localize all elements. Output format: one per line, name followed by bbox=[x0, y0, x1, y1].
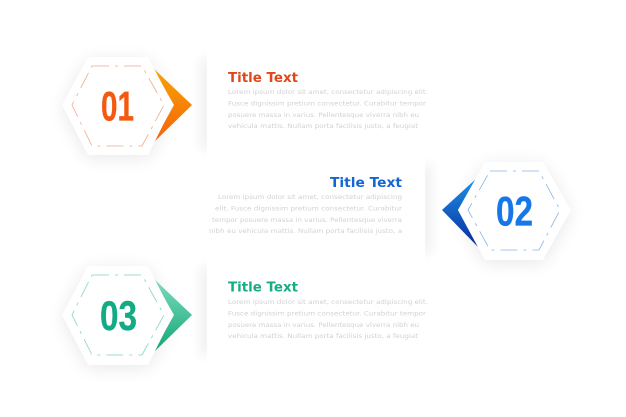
icon: blue arrow bbox=[442, 177, 478, 247]
dashed hexagon 01 bbox=[72, 66, 164, 146]
body text 02: Lorem ipsum dolor sit amet, consectetur adipiscing bbox=[218, 194, 402, 201]
panel: step 03 bbox=[62, 266, 428, 368]
hexagon badge 03 bbox=[62, 266, 173, 365]
number 03: 03 bbox=[100, 292, 137, 339]
body text 02: elit. Fusce dignissim pretium consectetur. Curabitur bbox=[215, 206, 403, 212]
body text 02 bbox=[209, 194, 403, 235]
body text 03: Lorem ipsum dolor sit amet, consectetur adipiscing elit. bbox=[228, 299, 428, 306]
body text 01: vehicula mattis. Nullam porta facilisis justo, a feugiat bbox=[228, 123, 419, 130]
hexagon badge 02 bbox=[458, 162, 571, 260]
body text 02: tempor posuere massa in varius. Pellentesque viverra bbox=[212, 217, 402, 224]
body text 01: Lorem ipsum dolor sit amet, consectetur adipiscing elit. bbox=[228, 89, 428, 96]
body text 03: Fusce dignissim pretium consectetur. Curabitur tempor bbox=[228, 310, 427, 318]
body text 03: vehicula mattis. Nullam porta facilisis justo, a feugiat bbox=[228, 333, 419, 340]
title 03: Title Text bbox=[228, 280, 299, 296]
panel: step 01 bbox=[62, 57, 428, 158]
dashed hexagon 03 bbox=[72, 275, 164, 355]
dashed hexagon 02 bbox=[468, 171, 560, 250]
hexagon badge 01 bbox=[62, 57, 173, 155]
body text 03: posuere massa in varius. Pellentesque viverra nibh eu bbox=[228, 322, 419, 329]
icon: orange arrow bbox=[153, 68, 192, 143]
number 01: 01 bbox=[101, 82, 134, 130]
body text 01 bbox=[228, 89, 428, 130]
title 01: Title Text bbox=[228, 70, 299, 86]
body text 01: posuere massa in varius. Pellentesque viverra nibh eu bbox=[228, 112, 419, 119]
body text 02: nibh eu vehicula mattis. Nullam porta facilisis justo, a bbox=[209, 228, 402, 235]
panel: step 02 bbox=[209, 162, 571, 263]
number 02: 02 bbox=[496, 188, 533, 234]
body text 01: Fusce dignissim pretium consectetur. Curabitur tempor bbox=[228, 100, 427, 108]
body text 03 bbox=[228, 299, 428, 340]
title 02: Title Text bbox=[330, 175, 403, 191]
icon: green arrow bbox=[153, 278, 192, 353]
